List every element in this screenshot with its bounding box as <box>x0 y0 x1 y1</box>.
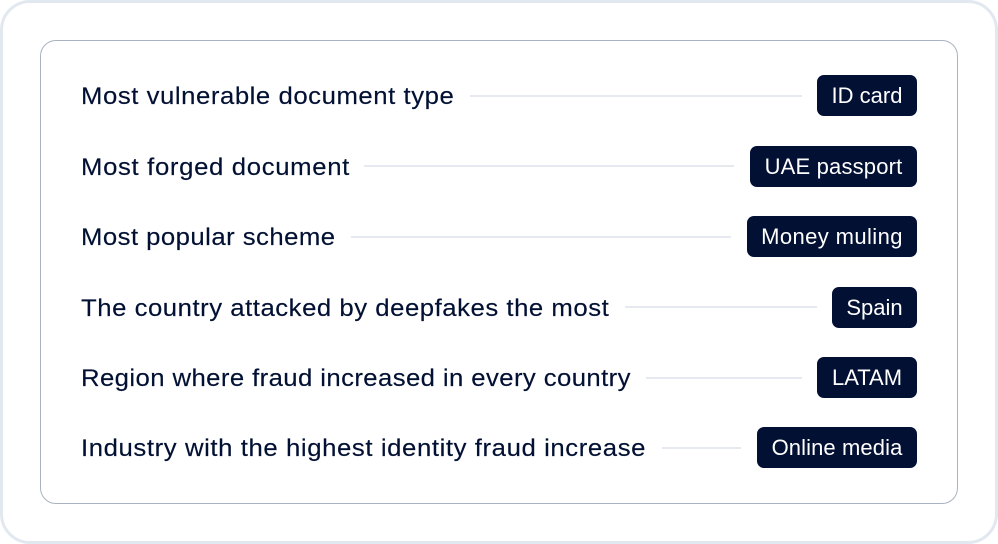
badge: LATAM <box>817 357 917 398</box>
badge: Spain: Spain <box>846 295 903 320</box>
row: most forged document <box>81 146 917 187</box>
label: Most vulnerable document type <box>81 83 454 110</box>
badge: Online media: Online media <box>772 435 902 460</box>
badge: UAE passport <box>750 146 917 187</box>
badge: Online media <box>757 427 917 468</box>
badge: Money muling <box>747 216 917 257</box>
panel: inner card <box>40 40 958 504</box>
badge: ID card <box>817 75 917 116</box>
label: Most forged document <box>81 154 350 181</box>
badge: Money muling: Money muling <box>761 224 903 249</box>
row: region <box>81 357 917 398</box>
label: Region where fraud increased in every country <box>81 365 631 392</box>
row: most vulnerable document type <box>81 75 917 116</box>
badge: UAE passport: UAE passport <box>765 154 902 179</box>
row: industry <box>81 427 917 468</box>
label: Industry with the highest identity fraud increase <box>81 435 646 462</box>
badge: LATAM: LATAM <box>832 365 902 390</box>
row: deepfakes <box>81 287 917 328</box>
badge: ID card: ID card <box>832 83 902 108</box>
badge: Spain <box>832 287 917 328</box>
label: The country attacked by deepfakes the most <box>81 295 609 322</box>
label: Most popular scheme <box>81 224 336 251</box>
row: most popular scheme <box>81 216 917 257</box>
